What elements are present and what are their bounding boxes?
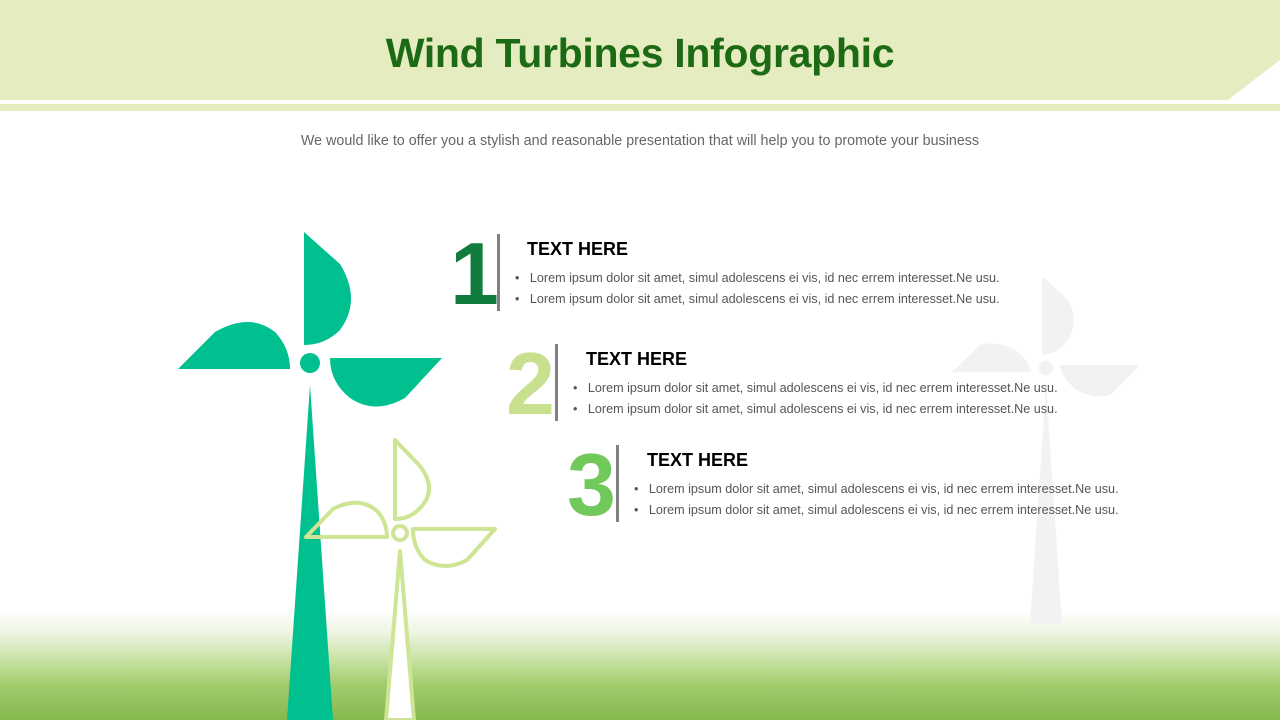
bullets 1: • Lorem ipsum dolor sit amet, simul adolescens ei vis, id nec errem interesset.Ne usu. <box>515 271 1000 285</box>
bullets 1: • Lorem ipsum dolor sit amet, simul adolescens ei vis, id nec errem interesset.Ne usu. <box>515 292 1000 306</box>
bullets 2 <box>573 381 1058 416</box>
bullets 1 <box>515 271 1000 306</box>
item 1 <box>450 224 1000 323</box>
title: Wind Turbines Infographic <box>386 30 894 76</box>
number 3: 3 <box>567 435 612 534</box>
bullets 2: • Lorem ipsum dolor sit amet, simul adolescens ei vis, id nec errem interesset.Ne usu. <box>573 402 1058 416</box>
item 2 <box>506 334 1058 433</box>
heading 3: TEXT HERE <box>647 450 748 470</box>
bullets 2: • Lorem ipsum dolor sit amet, simul adolescens ei vis, id nec errem interesset.Ne usu. <box>573 381 1058 395</box>
icon: grey turbine <box>952 276 1140 620</box>
subtitle: We would like to offer you a stylish and reasonable presentation that will help you to promote your business <box>301 133 979 149</box>
bullets 3: • Lorem ipsum dolor sit amet, simul adolescens ei vis, id nec errem interesset.Ne usu. <box>634 482 1119 496</box>
header band <box>0 0 1280 111</box>
item 3 <box>567 435 1119 534</box>
grass <box>0 610 1280 720</box>
icon: big green turbine <box>178 232 442 720</box>
bullets 3: • Lorem ipsum dolor sit amet, simul adolescens ei vis, id nec errem interesset.Ne usu. <box>634 503 1119 517</box>
number 1: 1 <box>450 224 495 323</box>
heading 1: TEXT HERE <box>527 239 628 259</box>
bullets 3 <box>634 482 1119 517</box>
icon: outline light-green turbine <box>304 438 497 720</box>
number 2: 2 <box>506 334 551 433</box>
heading 2: TEXT HERE <box>586 349 687 369</box>
